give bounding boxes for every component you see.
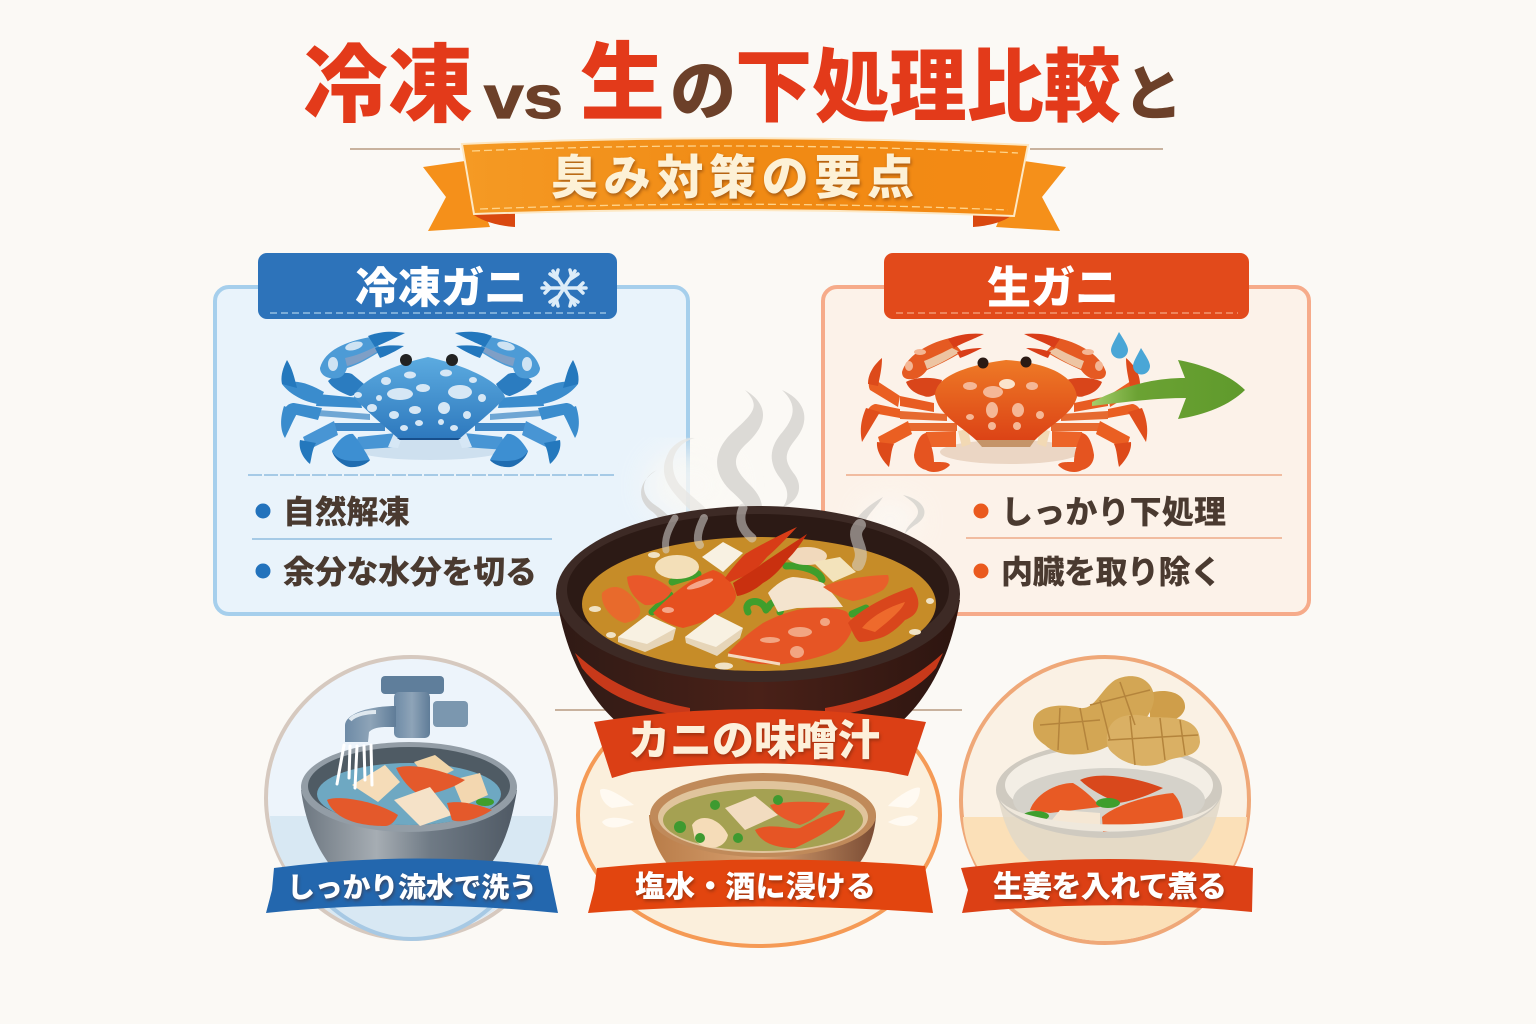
steam glow	[645, 447, 920, 542]
title: の	[670, 38, 736, 134]
tofu and crab meat	[702, 542, 743, 572]
bullet: drain water: 余分な水分を切る	[283, 547, 537, 593]
illustration: mini soup bowl	[649, 773, 876, 865]
title: 下処理比較	[735, 23, 1121, 139]
panel header: fresh crab	[884, 252, 1249, 319]
illustration: red crab	[861, 334, 1147, 472]
illustration: ginger	[1033, 676, 1200, 766]
oval: soak in salt water and sake	[578, 684, 940, 946]
title: vs	[484, 64, 563, 131]
lower rules	[555, 709, 962, 711]
illustration: steel bowl	[301, 742, 517, 865]
panel header: fresh crab: 生ガニ	[987, 252, 1119, 316]
subtitle ribbon	[423, 138, 1066, 231]
illustration: glass bowl	[996, 742, 1222, 865]
icon: water faucet	[337, 676, 468, 788]
divider	[846, 474, 1282, 476]
ribbon: simmer: 生姜を入れて煮る	[993, 862, 1227, 906]
illustration: blue crab	[281, 332, 579, 467]
steam	[641, 390, 924, 556]
illustration: crab pieces and tofu	[327, 755, 494, 826]
bullet: proper prep: しっかり下処理	[1001, 487, 1226, 533]
steam over bowl	[665, 508, 861, 565]
icon: white rays	[600, 788, 920, 827]
ribbon: simmer	[961, 859, 1253, 913]
miso soup surface	[582, 537, 936, 671]
oval: simmer with ginger	[961, 657, 1253, 943]
title: 冷凍	[303, 17, 473, 140]
panel header: frozen crab: 冷凍ガニ	[355, 254, 527, 316]
oval: rinse under running water	[266, 657, 558, 939]
greens	[652, 560, 866, 614]
bullet: remove guts: 内臓を取り除く	[1001, 547, 1222, 593]
arrow: green drain arrow	[1092, 360, 1245, 419]
divider	[248, 474, 616, 476]
ribbon: rinse	[266, 858, 558, 913]
illustration: crab miso soup bowl	[556, 506, 960, 725]
title rules	[350, 148, 1163, 150]
bowl body	[557, 600, 960, 725]
title	[303, 15, 1183, 140]
title: 生	[580, 15, 665, 138]
ribbon: rinse: しっかり流水で洗う	[287, 866, 537, 906]
title: と	[1123, 46, 1183, 133]
icon: water drops	[1111, 332, 1150, 374]
icon: snowflake	[542, 270, 586, 306]
panel: fresh crab	[823, 252, 1309, 614]
panel header: frozen crab	[258, 253, 617, 319]
ribbon: soak: 塩水・酒に浸ける	[635, 862, 876, 906]
banner: crab miso soup: カニの味噌汁	[628, 707, 880, 768]
bullet: natural thaw: 自然解凍	[283, 487, 410, 533]
banner: crab miso soup	[594, 707, 926, 778]
subtitle ribbon: 臭み対策の要点	[551, 139, 914, 208]
panel: frozen crab	[215, 253, 688, 614]
ribbon: soak	[588, 859, 933, 913]
